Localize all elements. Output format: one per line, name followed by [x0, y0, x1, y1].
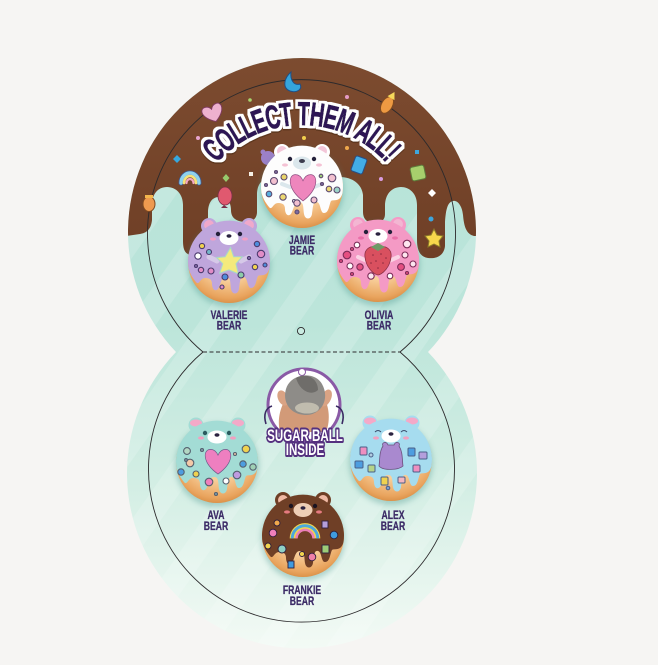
label: Frankie Bear: FRANKIE [283, 584, 321, 597]
sugar ball badge [265, 368, 343, 460]
title: A [349, 111, 380, 150]
title [195, 95, 408, 168]
title: C [195, 131, 232, 168]
donut: Alex Bear [349, 416, 433, 505]
title: L [360, 119, 392, 157]
label: Ava Bear: AVA [208, 509, 224, 522]
sugar ball badge: SUGAR BALL [267, 427, 343, 446]
title: H [308, 95, 327, 134]
donut: Jamie Bear [260, 144, 344, 232]
title: T [277, 95, 294, 134]
fold lines [148, 80, 456, 622]
label: Olivia Bear: BEAR [367, 319, 391, 333]
donut: Olivia Bear [336, 217, 420, 306]
title: C [261, 97, 284, 137]
title: L [369, 128, 403, 164]
label: Valerie Bear: VALERIE [211, 309, 247, 322]
donut: Valerie Bear [187, 218, 271, 307]
label: Alex Bear: ALEX [382, 509, 404, 522]
label: Ava Bear: BEAR [204, 520, 228, 533]
title: E [246, 101, 272, 141]
donut: Frankie Bear [261, 492, 345, 581]
label: Jamie Bear: JAMIE [289, 234, 315, 247]
label: Frankie Bear: BEAR [290, 595, 314, 608]
sugar ball badge: INSIDE [286, 441, 324, 460]
title: ! [377, 137, 408, 168]
title: E [320, 97, 342, 137]
title: L [221, 113, 251, 151]
card background [127, 58, 477, 648]
label: Alex Bear: BEAR [381, 520, 405, 533]
decorative cereal icons [143, 72, 443, 247]
chocolate drip [120, 50, 490, 258]
title: T [297, 95, 310, 132]
label: Valerie Bear: BEAR [217, 319, 241, 333]
title: O [207, 120, 242, 159]
label: Olivia Bear: OLIVIA [365, 309, 393, 322]
title: L [233, 106, 261, 145]
donut: Ava Bear [175, 418, 259, 507]
title: M [331, 101, 360, 142]
label: Jamie Bear: BEAR [290, 244, 314, 258]
